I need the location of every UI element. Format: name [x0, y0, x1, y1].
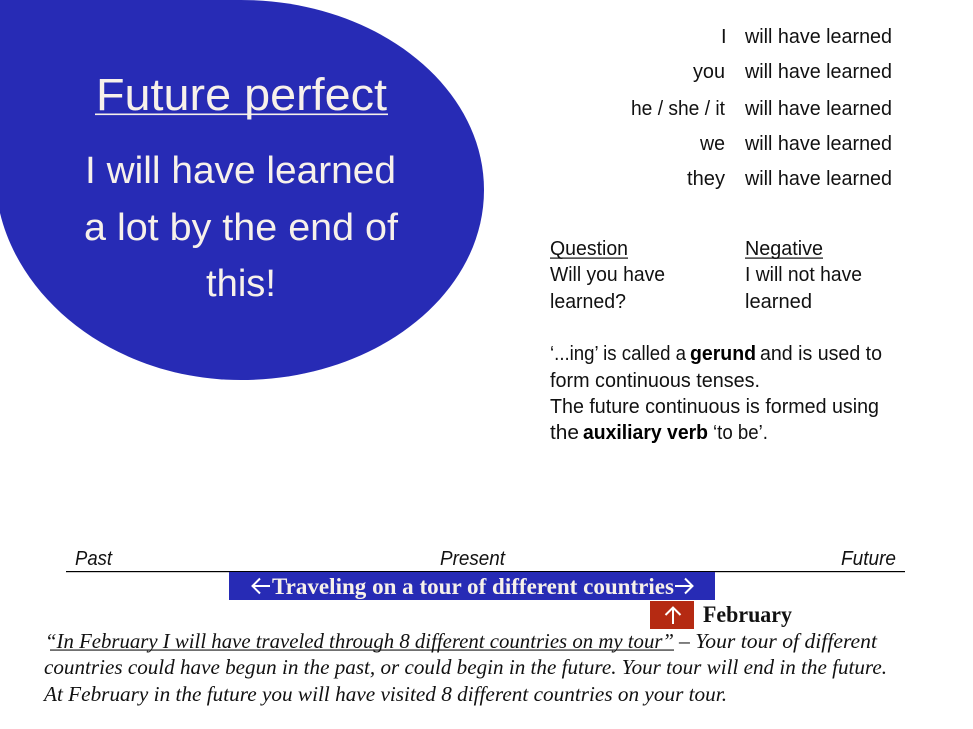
- title: Future perfect: [96, 69, 388, 120]
- example explanation paragraph: countries could have begun in the past, or could begin in the future. Your tour will end in the future.: [44, 655, 887, 679]
- grammar explanation: gerund: [690, 343, 756, 365]
- example explanation paragraph: – Your tour of different: [678, 629, 878, 653]
- grammar explanation: [550, 343, 882, 444]
- example explanation paragraph: [42, 629, 887, 706]
- timeline labels: Present: [440, 548, 506, 570]
- example sentence: a lot by the end of: [84, 207, 398, 249]
- grammar explanation: ‘to be’.: [713, 422, 768, 444]
- panel: conjugation table: you: [693, 61, 725, 83]
- duration bar: Traveling on a tour of different countries: [272, 574, 674, 599]
- timeline labels: Future: [841, 548, 896, 570]
- grammar explanation: form continuous tenses.: [550, 370, 760, 392]
- panel: conjugation table: he / she / it: [631, 98, 725, 120]
- timeline labels: [75, 548, 896, 570]
- grammar explanation: auxiliary verb: [583, 422, 708, 444]
- panel: conjugation table: [631, 26, 892, 190]
- negative form: learned: [745, 291, 812, 313]
- panel: conjugation table: will have learned: [744, 61, 892, 83]
- february label: February: [703, 602, 792, 627]
- negative form: Negative: [745, 238, 823, 260]
- grammar explanation: ‘...ing’ is called a: [550, 343, 687, 365]
- panel: conjugation table: we: [699, 133, 725, 155]
- panel: conjugation table: I: [721, 26, 727, 48]
- grammar explanation: and is used to: [760, 343, 882, 365]
- icon: red up arrow marker: [650, 601, 694, 629]
- question form: learned?: [550, 291, 626, 313]
- panel: conjugation table: will have learned: [744, 98, 892, 120]
- question form: Question: [550, 238, 628, 260]
- question form: Will you have: [550, 264, 665, 286]
- grammar explanation: the: [550, 422, 579, 444]
- timeline: [66, 548, 905, 629]
- example sentence: this!: [206, 263, 276, 305]
- timeline labels: Past: [75, 548, 113, 570]
- panel: conjugation table: they: [687, 168, 725, 190]
- negative form: [745, 238, 862, 313]
- example sentence: I will have learned: [85, 150, 396, 192]
- example explanation paragraph: At February in the future you will have visited 8 different countries on your tour.: [42, 682, 727, 706]
- question form: [550, 238, 665, 313]
- panel: conjugation table: will have learned: [744, 168, 892, 190]
- panel: conjugation table: will have learned: [744, 133, 892, 155]
- example explanation paragraph: “In February I will have traveled through 8 different countries on my tour”: [45, 629, 674, 653]
- panel: blue title blob: [0, 0, 484, 380]
- negative form: I will not have: [745, 264, 862, 286]
- grammar explanation: The future continuous is formed using: [550, 396, 879, 418]
- panel: conjugation table: will have learned: [744, 26, 892, 48]
